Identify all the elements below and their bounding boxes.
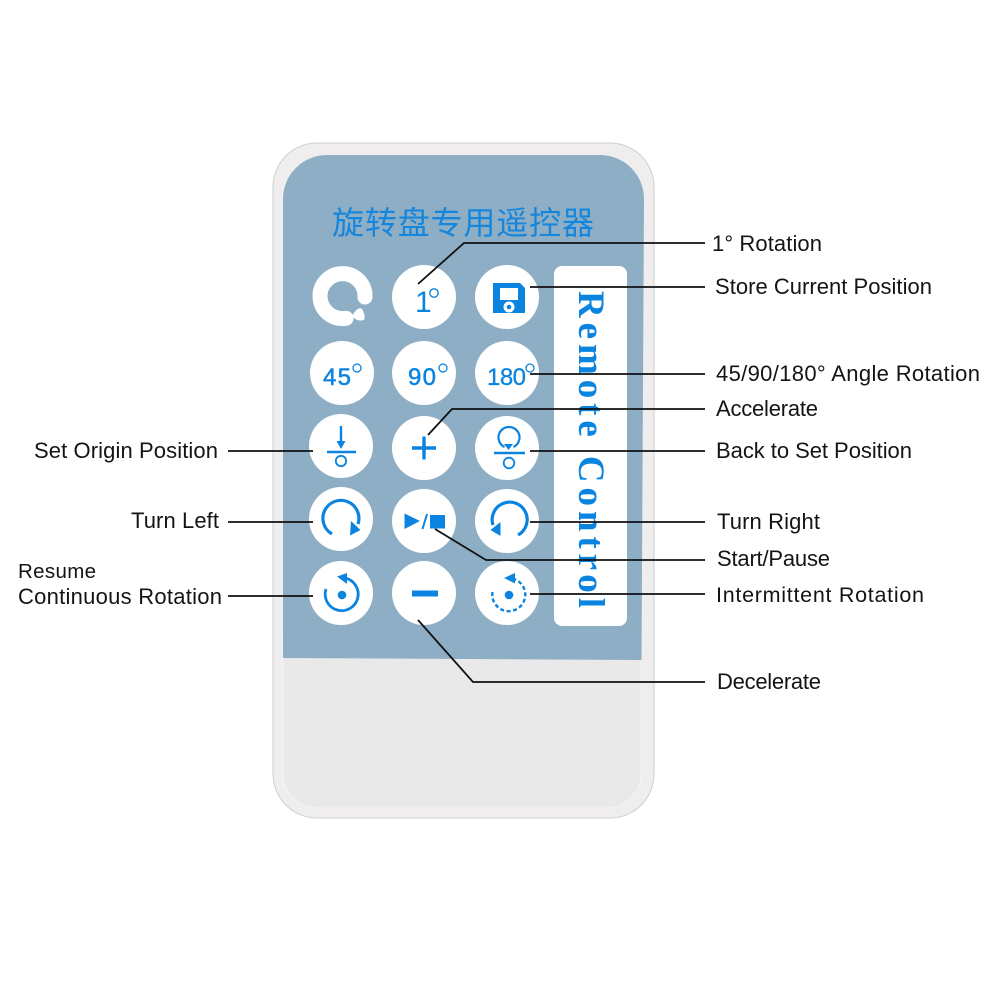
- button: intermittent rotation: [475, 561, 539, 625]
- callout leader lines: [228, 243, 705, 682]
- button: continuous rotation: [309, 561, 373, 625]
- button: store: [475, 265, 539, 329]
- label: decelerate: Decelerate: [717, 669, 821, 694]
- label: back to set position: Back to Set Position: [716, 438, 912, 463]
- button: 90 degrees: [392, 341, 456, 405]
- button: 1 degree: 1: [415, 286, 432, 319]
- button: 45 degrees: [310, 341, 374, 405]
- button: 1 degree: [392, 265, 456, 329]
- label: continuous rotation: Continuous Rotation: [18, 584, 222, 609]
- label: 1 degree rotation: 1° Rotation: [712, 231, 822, 256]
- button: decelerate: [392, 561, 456, 625]
- button: turn left: [309, 487, 373, 551]
- button: back to set position: [475, 416, 539, 480]
- label: turn left: Turn Left: [131, 508, 219, 533]
- label: store current position: Store Current Position: [715, 274, 932, 299]
- vertical label panel: [554, 266, 627, 626]
- label: turn right: Turn Right: [717, 509, 820, 534]
- label: set origin position: Set Origin Position: [34, 438, 218, 463]
- button: start/pause: [392, 489, 456, 553]
- chinese title: 旋转盘专用遥控器: [332, 205, 594, 241]
- remote control vertical text: Remote Control: [570, 291, 611, 608]
- label: start/pause: Start/Pause: [717, 546, 830, 571]
- button: set origin: [309, 414, 373, 478]
- button: 90 degrees: 90: [408, 364, 436, 391]
- button: logo: [320, 274, 365, 320]
- button: turn right: [475, 489, 539, 553]
- label: intermittent rotation: Intermittent Rotation: [716, 583, 924, 607]
- button: 180 degrees: 180: [487, 364, 526, 391]
- button: 45 degrees: 45: [323, 364, 351, 391]
- remote control body: [273, 143, 654, 818]
- label: angle rotation: 45/90/180° Angle Rotation: [716, 361, 980, 386]
- blue panel: [283, 155, 644, 660]
- button: accelerate: [392, 416, 456, 480]
- label: accelerate: Accelerate: [716, 396, 818, 421]
- label: resume: Resume: [18, 560, 96, 583]
- lower blank label area: [283, 600, 641, 808]
- button: 180 degrees: [475, 341, 539, 405]
